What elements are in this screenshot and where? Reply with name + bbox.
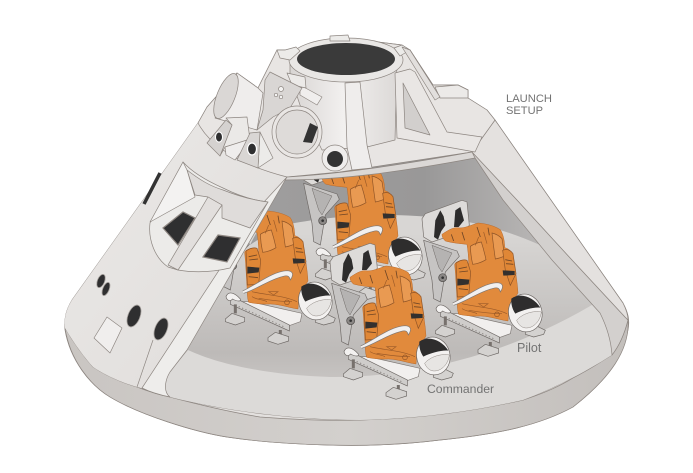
alcove upper band xyxy=(187,170,268,228)
window 1 xyxy=(163,212,195,245)
tag dot 2 xyxy=(274,93,278,97)
neck top tab xyxy=(277,47,300,60)
neck outer ring xyxy=(289,38,403,82)
fin diagonal xyxy=(402,47,440,100)
label: pilot: Pilot xyxy=(517,341,542,355)
bottom rim band xyxy=(65,320,628,445)
alcove recess xyxy=(150,162,268,272)
port large 1 xyxy=(124,303,144,329)
window 2 xyxy=(203,235,240,262)
label: commander: Commander xyxy=(427,382,494,396)
side nozzle body xyxy=(215,73,263,130)
hull seam line xyxy=(137,340,153,387)
small porthole opening xyxy=(327,151,343,167)
interior floor xyxy=(165,152,612,420)
window divider pillar xyxy=(168,197,222,270)
box between fins xyxy=(225,140,248,160)
fin rear block xyxy=(435,85,468,98)
lower floor highlight xyxy=(165,300,612,420)
large porthole dark opening xyxy=(303,123,318,143)
port large 2 xyxy=(151,316,171,342)
astronaut: pilot xyxy=(422,200,546,356)
large porthole ring xyxy=(272,106,322,158)
central pillar xyxy=(345,82,372,170)
right support fin xyxy=(395,47,482,152)
left hull strip xyxy=(142,177,287,397)
neck cylinder xyxy=(290,60,397,150)
right wall outer strip xyxy=(472,120,628,320)
fin 2 left face xyxy=(237,132,260,168)
tag dot 1 xyxy=(278,86,284,92)
ledge front lip xyxy=(285,152,475,180)
rear block xyxy=(287,73,306,88)
port small 1 xyxy=(95,273,107,289)
hatch rectangle panel xyxy=(94,317,122,353)
side nozzle ring xyxy=(209,70,243,122)
fin 1 hole xyxy=(216,132,222,142)
fin 2 hole xyxy=(248,143,256,155)
label: launch setup: LAUNCH xyxy=(506,93,552,105)
neck right tab xyxy=(394,45,410,56)
small porthole ring xyxy=(322,145,348,171)
tag dot 3 xyxy=(279,95,283,99)
upper hull ledge and dome xyxy=(198,38,495,177)
capsule hull silhouette xyxy=(65,38,629,445)
upper block xyxy=(300,85,322,105)
left hull panel xyxy=(65,123,287,388)
fin frame xyxy=(395,69,482,152)
right wall inner band xyxy=(472,152,628,355)
large porthole inner xyxy=(276,110,318,154)
window alcove xyxy=(150,162,268,272)
astronaut: rear left xyxy=(212,188,336,344)
alcove left facet xyxy=(150,162,195,222)
port small 2 xyxy=(100,281,112,297)
neck top tab 2 xyxy=(330,35,350,41)
dark side slit xyxy=(144,173,160,204)
docking neck xyxy=(277,35,410,150)
label: launch setup: SETUP xyxy=(506,105,543,117)
fin 1 right face xyxy=(220,117,250,156)
neck opening xyxy=(297,43,395,75)
fin 2 right face xyxy=(258,132,273,168)
fin opening xyxy=(403,83,430,135)
interior back wall xyxy=(250,152,540,245)
tag plate with dots xyxy=(257,72,302,130)
astronaut: rear right xyxy=(302,143,426,299)
left dome cluster xyxy=(207,70,348,171)
hull ports xyxy=(95,273,171,342)
fin 1 left face xyxy=(207,120,232,156)
astronaut: commander xyxy=(330,243,454,399)
crew seats and astronauts xyxy=(212,143,546,399)
